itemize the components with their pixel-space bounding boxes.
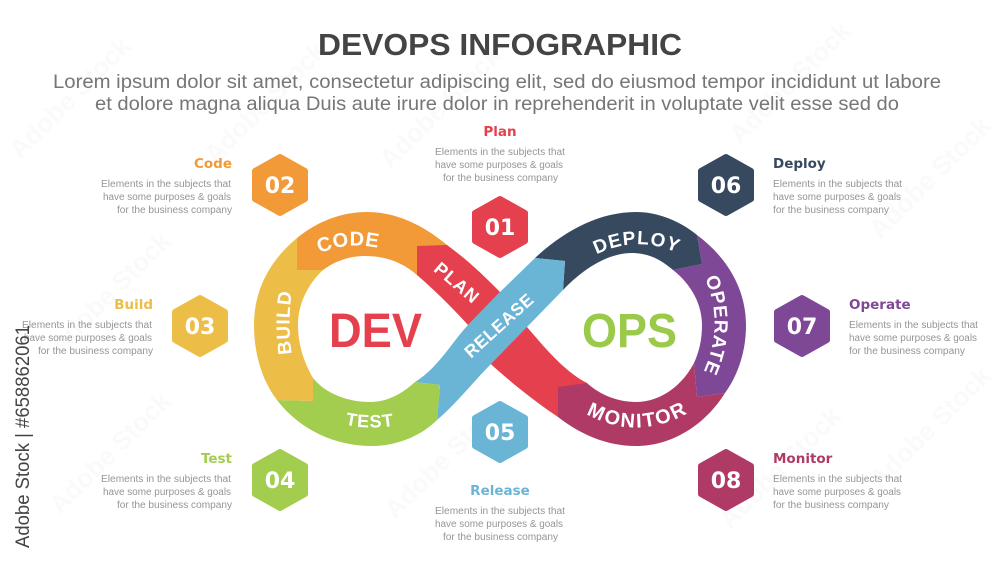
text block: deploy: for the business company (773, 205, 889, 216)
faint stock watermark pattern: Adobe Stock (43, 225, 177, 359)
faint stock watermark pattern: Adobe Stock (378, 390, 512, 524)
title: DEVOPS INFOGRAPHIC (318, 27, 682, 62)
infinity loop diagram (254, 212, 746, 446)
faint stock watermark pattern: Adobe Stock (43, 385, 177, 519)
label: monitor: MONITOR (587, 402, 687, 428)
text block: plan: for the business company (443, 173, 558, 184)
segment: code (297, 212, 447, 275)
icon: hexagon 06: 06 (711, 174, 741, 199)
icon: hexagon 03: 03 (185, 315, 215, 340)
text block: release: have some purposes & goals (435, 519, 563, 530)
text block: test: have some purposes & goals (103, 487, 231, 498)
label: test: TEST (347, 412, 392, 428)
label: operate: OPERATE (704, 276, 728, 376)
segment: plan lower (478, 314, 587, 417)
step 02 code (101, 156, 305, 216)
icon: hexagon 07: 07 (787, 315, 817, 340)
heading: monitor: Monitor (773, 451, 833, 467)
label: plan: PLAN (434, 262, 480, 304)
step 01 plan (435, 124, 565, 255)
text block: operate (849, 320, 978, 357)
text block: deploy: Elements in the subjects that (773, 179, 902, 190)
faint stock watermark pattern: Adobe Stock (198, 35, 332, 169)
text block: test: for the business company (117, 500, 232, 511)
text block: code: have some purposes & goals (103, 192, 231, 203)
icon: hexagon 04 (255, 452, 305, 508)
heading: deploy: Deploy (773, 156, 826, 172)
text block: release: for the business company (443, 532, 558, 543)
text block: operate: Elements in the subjects that (849, 320, 978, 331)
faint stock watermark pattern: Adobe Stock (373, 40, 507, 174)
text block: deploy (773, 179, 902, 216)
icon: hexagon 03 (175, 298, 225, 354)
text block: code: Elements in the subjects that (101, 179, 231, 190)
text block: release (435, 506, 565, 543)
step 07 operate (777, 297, 978, 357)
step 04 test (101, 451, 305, 511)
icon: hexagon 07 (777, 298, 827, 354)
text block: build: have some purposes & goals (24, 333, 152, 344)
icon: hexagon 02: 02 (265, 174, 295, 199)
text block: code: for the business company (117, 205, 232, 216)
heading: operate: Operate (849, 297, 911, 313)
faint stock watermark pattern: Adobe Stock (3, 30, 137, 164)
text block: plan: Elements in the subjects that (435, 147, 565, 158)
text block: monitor: have some purposes & goals (773, 487, 901, 498)
segment: plan upper (417, 245, 500, 325)
step 03 build (22, 297, 225, 357)
heading: OPS: OPS (582, 305, 677, 358)
faint stock watermark pattern: Adobe Stock (863, 110, 997, 244)
label: release: RELEASE (464, 293, 534, 358)
label: code: CODE (318, 232, 379, 252)
heading: build: Build (114, 297, 153, 313)
text block: build: Elements in the subjects that (22, 320, 152, 331)
segment: deploy (535, 212, 702, 290)
faint stock watermark pattern: Adobe Stock (863, 360, 997, 494)
heading: code: Code (194, 156, 232, 172)
label: deploy: DEPLOY (592, 231, 681, 254)
icon: hexagon 08: 08 (711, 469, 741, 494)
text block: build: for the business company (38, 346, 153, 357)
segment: monitor (558, 363, 725, 446)
subtitle text block (53, 72, 941, 115)
text block: code (101, 179, 232, 216)
subtitle text block: et dolore magna aliqua Duis aute irure dolor in reprehenderit in voluptate velit esse sed do (95, 94, 899, 115)
text block: operate: for the business company (849, 346, 965, 357)
step 06 deploy (701, 156, 902, 216)
segment: test (277, 378, 440, 446)
icon: hexagon 01: 01 (485, 216, 515, 241)
step 08 monitor (701, 451, 902, 511)
icon: hexagon 02 (255, 157, 305, 213)
text block: operate: have some purposes & goals (849, 333, 977, 344)
faint stock watermark pattern: Adobe Stock (723, 15, 857, 149)
text block: release: Elements in the subjects that (435, 506, 565, 517)
segment: operate (673, 235, 746, 397)
text block: build (22, 320, 153, 357)
segment: release (415, 258, 565, 420)
heading: test: Test (201, 451, 233, 467)
text block: monitor: for the business company (773, 500, 889, 511)
icon: hexagon 06 (701, 157, 751, 213)
text block: deploy: have some purposes & goals (773, 192, 901, 203)
segment: build (254, 238, 323, 401)
text block: monitor: Elements in the subjects that (773, 474, 902, 485)
subtitle text block: Lorem ipsum dolor sit amet, consectetur adipiscing elit, sed do eiusmod tempor incididunt ut labore (53, 72, 941, 93)
heading: release: Release (470, 483, 530, 499)
step 05 release (435, 404, 565, 543)
text block: test: Elements in the subjects that (101, 474, 231, 485)
icon: hexagon 05: 05 (485, 421, 515, 446)
heading: plan: Plan (483, 124, 517, 140)
text block: test (101, 474, 232, 511)
text block: plan (435, 147, 565, 184)
text block: monitor (773, 474, 902, 511)
faint stock watermark pattern: Adobe Stock (713, 400, 847, 534)
label: build: BUILD (276, 292, 292, 354)
text block: plan: have some purposes & goals (435, 160, 563, 171)
stock id side text: Adobe Stock | #658862061 (13, 325, 34, 548)
icon: hexagon 04: 04 (265, 469, 295, 494)
heading: DEV: DEV (329, 305, 422, 358)
icon: hexagon 08 (701, 452, 751, 508)
